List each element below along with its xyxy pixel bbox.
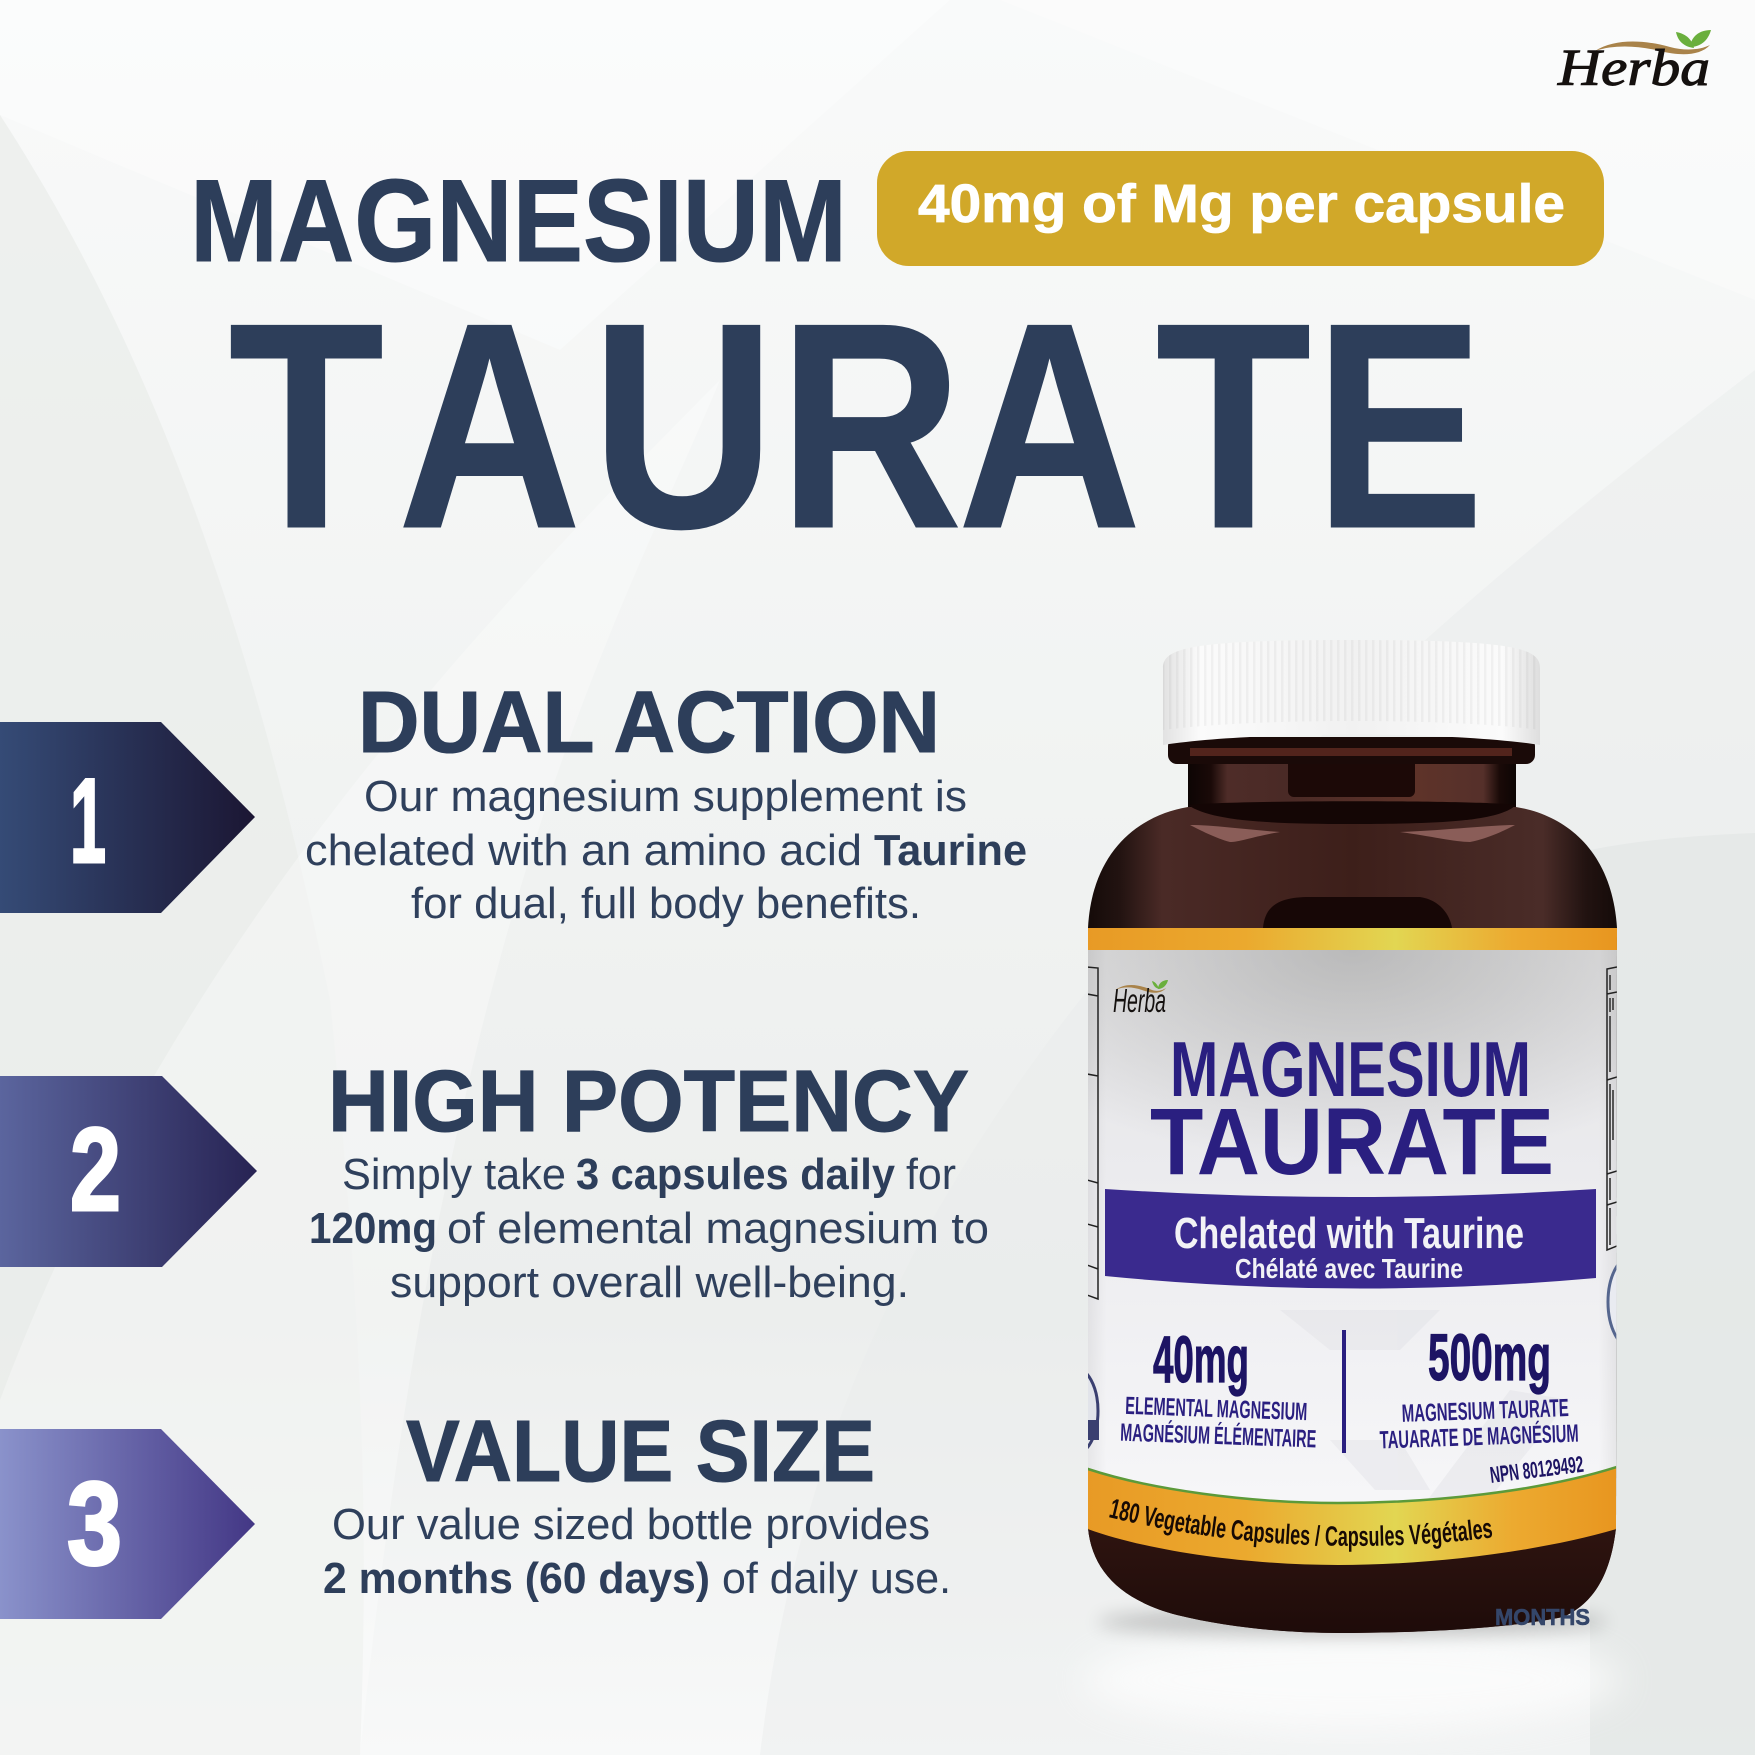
bottle shadow: [1097, 1608, 1607, 1636]
arrow 2: 2: [70, 1104, 121, 1236]
text block: high potency: support overall well-being.: [390, 1258, 909, 1307]
months stray text: MONTHS: [1495, 1604, 1590, 1630]
side info panel right: [1607, 967, 1617, 1250]
bottle neck: [1168, 737, 1535, 815]
text block: value size: Our value sized bottle provides: [332, 1500, 930, 1549]
side info panel left: [1087, 967, 1098, 1299]
label dose right: TAUARATE DE MAGNÉSIUM: [1379, 1419, 1579, 1454]
heading: HIGH POTENCY: HIGH POTENCY: [328, 1053, 969, 1150]
badge: 40mg of Mg per capsule: [877, 151, 1604, 266]
text block: high potency: Simply take: [342, 1150, 566, 1199]
label divider: [1342, 1330, 1346, 1453]
text block: value size: [323, 1500, 951, 1603]
text block: dual action: Our magnesium supplement is: [364, 772, 967, 821]
arrow 3: [0, 1429, 255, 1619]
arrow 1: 1: [70, 754, 106, 888]
seal vegan: [1088, 1373, 1100, 1449]
text block: dual action: [305, 772, 1027, 928]
heading: VALUE SIZE: VALUE SIZE: [406, 1403, 875, 1500]
badge: 40mg of Mg per capsule: 40mg of Mg per capsule: [918, 174, 1565, 234]
product label: [1088, 928, 1617, 1633]
title: TAURATE: TAURATE: [228, 262, 1484, 590]
text block: value size: of daily use.: [722, 1554, 951, 1603]
text block: high potency: of elemental magnesium to: [447, 1204, 989, 1253]
label dose left: [1120, 1322, 1317, 1453]
text block: high potency: 3 capsules daily: [576, 1150, 895, 1199]
label dose right: [1379, 1320, 1579, 1454]
text block: high potency: 120mg: [309, 1204, 437, 1253]
label logo: [1113, 980, 1168, 1019]
label dose right: 500mg: [1428, 1320, 1551, 1394]
logo: Herba: Herba: [1557, 40, 1710, 97]
label title: TAURATE: [1150, 1089, 1554, 1195]
label dose left: 40mg: [1153, 1322, 1249, 1396]
text block: dual action: chelated with an amino acid: [305, 826, 862, 875]
label dose right: MAGNESIUM TAURATE: [1401, 1394, 1569, 1428]
bottle cap: [1163, 640, 1540, 745]
text block: high potency: [309, 1150, 989, 1307]
text block: high potency: for: [906, 1150, 956, 1199]
seal right: [1606, 1264, 1616, 1340]
label purple band: Chélaté avec Taurine: [1235, 1253, 1463, 1284]
label NPN: NPN 80129492: [1488, 1451, 1585, 1488]
heading: DUAL ACTION: DUAL ACTION: [358, 674, 940, 771]
label capsule count: 180 Vegetable Capsules / Capsules Végétales: [1109, 1499, 1492, 1552]
lower glass: [1088, 1529, 1616, 1633]
arrow 3: 3: [67, 1458, 122, 1590]
text block: dual action: Taurine: [874, 826, 1027, 875]
product bottle: [1088, 640, 1617, 1716]
label title: MAGNESIUM: [1170, 1025, 1531, 1113]
title: MAGNESIUM: MAGNESIUM: [190, 155, 847, 286]
label logo: Herba: [1113, 982, 1166, 1019]
arrow 2: [0, 1076, 257, 1267]
bottle reflection: [1082, 1630, 1622, 1730]
text block: dual action: for dual, full body benefits.: [411, 879, 921, 928]
arrow 1: [0, 722, 255, 913]
label dose left: ELEMENTAL MAGNESIUM: [1125, 1392, 1308, 1426]
label purple band: [1105, 1189, 1596, 1289]
bottle glass: [1088, 807, 1617, 1633]
label facets: [1336, 1390, 1532, 1498]
text block: value size: 2 months (60 days): [323, 1554, 710, 1603]
label title: [1150, 1025, 1554, 1195]
bottle shoulder shading: [1188, 801, 1516, 928]
label dose left: MAGNÉSIUM ÉLÉMENTAIRE: [1120, 1418, 1317, 1453]
label purple band: Chelated with Taurine: [1174, 1209, 1524, 1258]
